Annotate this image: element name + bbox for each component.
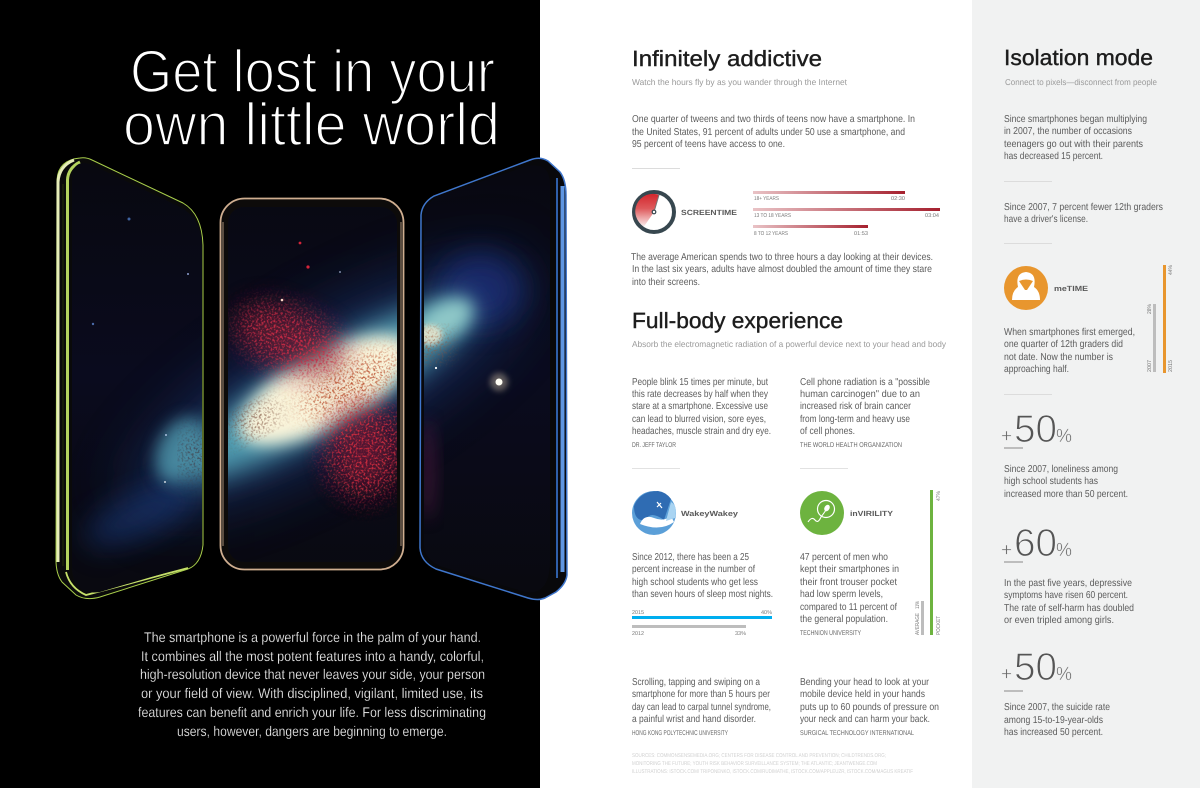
text block: neck pressure: mobile device held in your hands <box>800 689 925 700</box>
stat: suicide +50% <box>1001 646 1110 738</box>
text block: virility: kept their smartphones in <box>800 564 899 575</box>
text block: blink rate: can lead to blurred vision, sore eyes, <box>632 414 766 425</box>
bar chart: sleep: 40% <box>761 610 772 616</box>
text block: neck pressure <box>800 677 939 737</box>
text block: virility: 47 percent of men who <box>800 552 888 563</box>
bar chart: not dating: 2015 <box>1168 360 1174 372</box>
icon: screentime gauge <box>634 192 674 232</box>
text block: smartphone ownership: the United States, 91 percent of adults under 50 use a smartphone, and <box>632 127 905 138</box>
intro paragraph: high-resolution device that never leaves your side, your person <box>140 666 485 682</box>
text block: sleep: high school students who get less <box>632 577 758 588</box>
text block: dating: When smartphones first emerged, <box>1004 327 1135 338</box>
text block: dating: approaching half. <box>1004 364 1069 375</box>
bar chart: sleep <box>632 610 772 637</box>
stat: suicide +50%: has increased 50 percent. <box>1004 727 1103 738</box>
text block: carpal tunnel: smartphone for more than 5 hours per <box>632 689 771 700</box>
text block: smartphone ownership <box>632 114 915 150</box>
text block: blink rate: this rate decreases by half when they <box>632 389 768 400</box>
title: Get lost in your <box>130 38 495 105</box>
text block: outings with parents <box>1004 114 1147 162</box>
bar chart: screen time by age: 01:53 <box>854 231 868 237</box>
stat: suicide +50%: % <box>1056 664 1072 685</box>
text block: outings with parents: in 2007, the number of occasions <box>1004 126 1132 137</box>
text block: neck pressure: your neck and can harm your back. <box>800 714 930 725</box>
stat: loneliness +50%: high school students has <box>1004 476 1098 487</box>
text block: blink rate: stare at a smartphone. Excessive use <box>632 401 768 412</box>
stat: loneliness +50%: Since 2007, loneliness among <box>1004 464 1118 475</box>
subheading: Watch the hours fly by as you wander through the Internet <box>632 77 848 87</box>
stat: depression +60% <box>1001 522 1134 626</box>
icon: metime hooded figure <box>1004 266 1048 310</box>
text block: neck pressure: Bending your head to look at your <box>800 677 930 688</box>
label: metime: meTIME <box>1054 284 1088 293</box>
heading: isolation mode: Isolation mode <box>1004 45 1153 70</box>
intro paragraph: features can benefit and enrich your life. For less discriminating <box>138 704 486 720</box>
text block: outings with parents: teenagers go out with their parents <box>1004 139 1143 150</box>
text block: blink rate: People blink 15 times per minute, but <box>632 377 768 388</box>
text block: dating: one quarter of 12th graders did <box>1004 339 1123 350</box>
title: own little world <box>123 91 500 158</box>
text block: dating <box>1004 327 1135 375</box>
text block: drivers license: Since 2007, 7 percent fewer 12th graders <box>1004 202 1163 213</box>
intro paragraph: users, however, dangers are beginning to emerge. <box>177 723 447 739</box>
text block: sleep: percent increase in the number of <box>632 564 755 575</box>
text block: drivers license <box>1004 202 1163 225</box>
stat: depression +60%: or even tripled among girls. <box>1004 615 1114 626</box>
label: screentime: SCREENTIME <box>681 208 737 217</box>
text block: dating: not date. Now the number is <box>1004 352 1113 363</box>
stat: suicide +50%: among 15-to-19-year-olds <box>1004 715 1103 726</box>
text block: blink rate <box>632 377 771 449</box>
panel: isolation mode <box>1001 45 1174 738</box>
bar chart: pocket vs average: 47% <box>936 491 942 501</box>
bar chart: not dating: 44% <box>1168 265 1174 275</box>
stat: loneliness +50%: % <box>1056 426 1072 447</box>
bar chart: sleep: 33% <box>735 631 746 637</box>
phone: right, blue frame <box>420 158 567 600</box>
stat: suicide +50%: + <box>1001 664 1012 685</box>
stat: suicide +50%: Since 2007, the suicide rate <box>1004 702 1110 713</box>
sources <box>632 753 914 775</box>
label: wakeywakey: WakeyWakey <box>681 509 739 518</box>
intro paragraph: It combines all the most potent features into a handy, colorful, <box>141 648 484 664</box>
stat: depression +60%: % <box>1056 540 1072 561</box>
sources: MONITORING THE FUTURE; YOUTH RISK BEHAVIOR SURVEILLANCE SYSTEM; THE ATLANTIC; JEANTWENGE.COM <box>632 761 877 767</box>
stat: loneliness +50%: 50 <box>1014 408 1057 451</box>
text block: neck pressure: puts up to 60 pounds of pressure on <box>800 702 939 713</box>
bar chart: pocket vs average <box>915 490 942 635</box>
text block: radiation: THE WORLD HEALTH ORGANIZATION <box>800 442 902 449</box>
text block: outings with parents: Since smartphones began multiplying <box>1004 114 1147 125</box>
text block: outings with parents: has decreased 15 percent. <box>1004 151 1103 162</box>
text block: radiation: human carcinogen" due to an <box>800 389 920 400</box>
bar chart: screen time by age: 18+ YEARS <box>754 196 779 202</box>
text block: sleep: Since 2012, there has been a 25 <box>632 552 749 563</box>
bar chart: sleep: 2012 <box>632 631 644 637</box>
text block: sleep <box>632 552 773 600</box>
text block: drivers license: have a driver's license. <box>1004 214 1088 225</box>
stat: depression +60%: symptoms have risen 60 percent. <box>1004 590 1128 601</box>
sources: SOURCES: COMMONSENSEMEDIA.ORG; CENTERS FOR DISEASE CONTROL AND PREVENTION; CHILDTRENDS.ORG; <box>632 753 886 759</box>
intro paragraph <box>138 629 486 739</box>
text block: average american: In the last six years, adults have almost doubled the amount of time they stare <box>632 264 932 275</box>
title <box>123 38 500 158</box>
galaxy on screens <box>60 150 563 600</box>
stat: depression +60%: In the past five years, depressive <box>1004 578 1132 589</box>
bar chart: not dating: 28% <box>1147 304 1153 314</box>
sources: ILLUSTRATIONS: ISTOCK.COM/ TRIPONENKO, ISTOCK.COM/RUDIMATHE, ISTOCK.COM/APPLEUZR, ISTOCK.COM/MAGUS KREATIF <box>632 769 914 775</box>
text block: carpal tunnel: HONG KONG POLYTECHNIC UNIVERSITY <box>632 730 728 737</box>
text block: radiation <box>800 377 930 449</box>
text block: carpal tunnel: a painful wrist and hand disorder. <box>632 714 756 725</box>
bar chart: screen time by age: 02:30 <box>891 196 905 202</box>
bar chart: sleep: 2015 <box>632 610 644 616</box>
text block: carpal tunnel: Scrolling, tapping and swiping on a <box>632 677 760 688</box>
text block: virility: their front trouser pocket <box>800 577 897 588</box>
stat: loneliness +50%: increased more than 50 percent. <box>1004 489 1128 500</box>
subheading: Connect to pixels—disconnect from people <box>1005 77 1157 87</box>
text block: virility: TECHNION UNIVERSITY <box>800 630 861 637</box>
text block: smartphone ownership: One quarter of tweens and two thirds of teens now have a smartphone. In <box>632 114 915 125</box>
stat: depression +60%: The rate of self-harm has doubled <box>1004 603 1134 614</box>
panel: infinitely addictive <box>631 46 940 288</box>
bar chart: pocket vs average: 11% <box>915 601 921 609</box>
intro paragraph: or your field of view. With disciplined, vigilant, limited use, its <box>141 685 483 701</box>
text block: carpal tunnel <box>632 677 771 737</box>
text block: sleep: than seven hours of sleep most nights. <box>632 589 773 600</box>
heading: full-body experience: Full-body experience <box>632 308 843 333</box>
stat: loneliness +50% <box>1001 408 1128 500</box>
bar chart: pocket vs average: POCKET <box>936 615 942 635</box>
text block: radiation: from long-term and heavy use <box>800 414 910 425</box>
text block: neck pressure: SURGICAL TECHNOLOGY INTERNATIONAL <box>800 730 914 737</box>
stat: depression +60%: + <box>1001 540 1012 561</box>
text block: smartphone ownership: 95 percent of teens have access to one. <box>632 139 785 150</box>
text block: carpal tunnel: day can lead to carpal tunnel syndrome, <box>632 702 771 713</box>
text block: radiation: of cell phones. <box>800 426 855 437</box>
phone: center, gold frame <box>220 198 404 570</box>
phones illustration <box>56 150 567 600</box>
text block: blink rate: headaches, muscle strain and dry eye. <box>632 426 771 437</box>
stars <box>92 218 508 483</box>
panel: full-body experience <box>632 308 947 775</box>
bar chart: screen time by age: 8 TO 12 YEARS <box>754 231 788 237</box>
text block: radiation: Cell phone radiation is a "possible <box>800 377 930 388</box>
heading: infinitely addictive: Infinitely addictive <box>632 46 822 71</box>
text block: blink rate: DR. JEFF TAYLOR <box>632 442 676 449</box>
text block: virility <box>800 552 899 637</box>
text block: average american: into their screens. <box>632 277 700 288</box>
bar chart: screen time by age <box>753 191 940 237</box>
bar chart: not dating: 2007 <box>1147 360 1153 372</box>
text block: radiation: increased risk of brain cancer <box>800 401 912 412</box>
icon: invirility <box>800 491 844 535</box>
text block: virility: had low sperm levels, <box>800 589 883 600</box>
label: invirility: inVIRILITY <box>850 509 893 518</box>
text block: average american: The average American spends two to three hours a day looking at their devices. <box>631 252 933 263</box>
intro paragraph: The smartphone is a powerful force in the palm of your hand. <box>144 629 481 645</box>
text block: virility: the general population. <box>800 614 888 625</box>
subheading: Absorb the electromagnetic radiation of a powerful device next to your head and body <box>632 339 947 349</box>
icon: wakeywakey sleeping face <box>632 491 676 535</box>
text block: average american <box>631 252 933 288</box>
phone: left, green frame <box>56 158 203 599</box>
text block: virility: compared to 11 percent of <box>800 602 897 613</box>
stat: suicide +50%: 50 <box>1014 646 1057 689</box>
stat: depression +60%: 60 <box>1014 522 1057 565</box>
bar chart: screen time by age: 13 TO 18 YEARS <box>754 213 791 219</box>
bar chart: not dating <box>1147 265 1174 373</box>
bar chart: pocket vs average: AVERAGE <box>915 613 921 635</box>
stat: loneliness +50%: + <box>1001 426 1012 447</box>
bar chart: screen time by age: 03:04 <box>925 213 939 219</box>
